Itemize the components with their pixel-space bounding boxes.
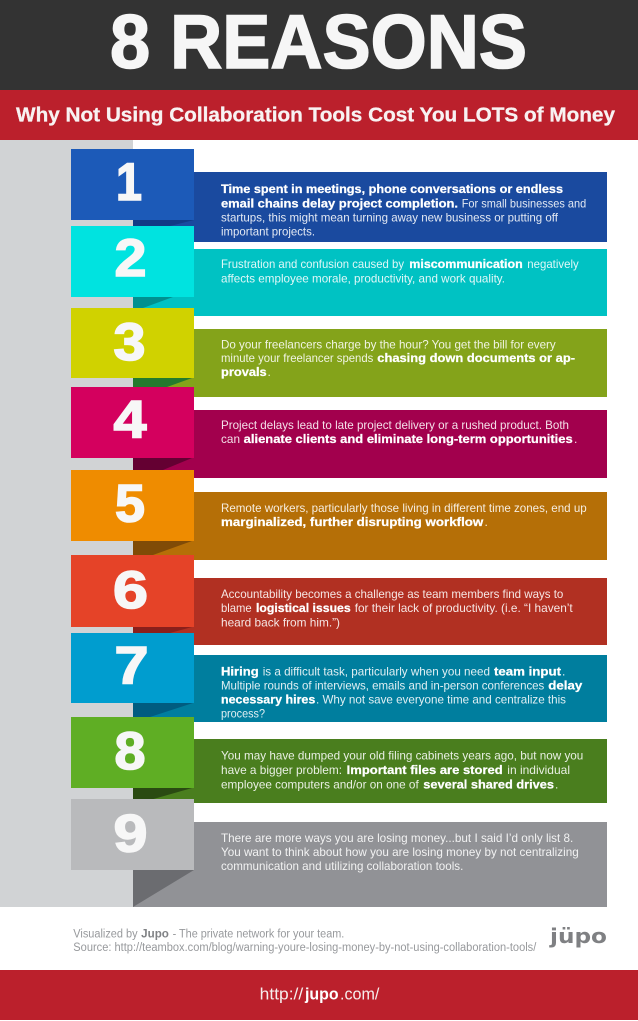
panel 8: important files: several shared drives bbox=[423, 777, 554, 791]
left gray stripe bbox=[0, 140, 133, 907]
panel 6: accountability bbox=[133, 578, 607, 645]
subtitle band bbox=[0, 90, 638, 140]
number tab 1: 1 bbox=[116, 153, 142, 212]
header band bbox=[0, 0, 638, 90]
title: 8 REASONS bbox=[110, 0, 527, 85]
panel 1: project delays: Time spent in meetings, phone conversations or endless bbox=[221, 182, 563, 196]
number tab 8 bbox=[71, 717, 194, 788]
panel 8: important files: employee computers and/or on one of bbox=[221, 777, 419, 791]
panel 2: miscommunication bbox=[133, 249, 607, 316]
panel 8: important files: have a bigger problem: bbox=[221, 763, 342, 777]
panel 2: miscommunication: affects employee morale, productivity, and work quality. bbox=[221, 271, 505, 285]
panel 4: alienate clients bbox=[133, 410, 607, 478]
panel 5: marginalized remote workers: Remote workers, particularly those living in different time zones, end up bbox=[221, 501, 587, 515]
panel 6: accountability: Accountability becomes a challenge as team members find ways to bbox=[221, 587, 564, 601]
footer url: .com/ bbox=[340, 984, 380, 1003]
credits text: Jupo bbox=[141, 928, 169, 940]
panel 6: accountability: for their lack of productivity. (i.e. “I haven’t bbox=[355, 601, 573, 615]
number tab 3 bbox=[71, 308, 194, 378]
panel 1: project delays: startups, this might mean turning away new business or putting off bbox=[221, 210, 559, 224]
logo: jupo: jüpo bbox=[549, 924, 607, 948]
panel 7: hiring bbox=[133, 655, 607, 722]
number tab 7: 7 bbox=[114, 636, 148, 695]
number tab 4: 4 bbox=[114, 390, 147, 449]
footer url bbox=[260, 984, 380, 1003]
panel 5: marginalized remote workers bbox=[133, 492, 607, 560]
panel 3: freelancer cost bbox=[133, 329, 607, 397]
panel 8: important files: . bbox=[555, 777, 558, 791]
number tab 6: 6 bbox=[113, 561, 148, 620]
number tab 4 bbox=[71, 387, 194, 458]
panel 5: marginalized remote workers: . bbox=[484, 515, 488, 529]
panel 2: miscommunication: miscommunication bbox=[409, 257, 523, 271]
panel 7: hiring: . bbox=[562, 664, 565, 678]
credits text: - The private network for your team. bbox=[173, 928, 344, 940]
number tab 9 bbox=[71, 799, 194, 870]
panel 3: freelancer cost: Do your freelancers charge by the hour? You get the bill for every bbox=[221, 337, 556, 351]
number tab 8: 8 bbox=[114, 722, 146, 781]
panel 4: alienate clients: alienate clients and eliminate long-term opportunities bbox=[244, 432, 573, 446]
panel 8: important files: You may have dumped your old filing cabinets years ago, but now you bbox=[221, 748, 583, 762]
footer url: http:// bbox=[260, 984, 303, 1003]
footer band bbox=[0, 970, 638, 1020]
panel 4: alienate clients: Project delays lead to late project delivery or a rushed product. Both bbox=[221, 418, 569, 432]
panel 3: freelancer cost: provals bbox=[221, 365, 267, 379]
panel 1: project delays: important projects. bbox=[221, 224, 315, 238]
footer url: jupo bbox=[304, 984, 339, 1003]
panel 1: project delays: For small businesses and bbox=[462, 196, 586, 210]
number tab 5 bbox=[71, 470, 194, 541]
panel 7: hiring: . Why not save everyone time and centralize this bbox=[316, 692, 566, 706]
subtitle: Why Not Using Collaboration Tools Cost You LOTS of Money bbox=[16, 105, 616, 127]
panel 7: hiring: team input bbox=[494, 664, 561, 678]
panel 3: freelancer cost: chasing down documents or ap- bbox=[377, 351, 575, 365]
panel 6: accountability: logistical issues bbox=[256, 601, 351, 615]
panel 5: marginalized remote workers: marginalized, further disrupting workflow bbox=[221, 515, 484, 529]
panel 7: hiring: delay bbox=[548, 678, 583, 692]
panel 6: accountability: blame bbox=[221, 601, 252, 615]
number tab 1 bbox=[71, 149, 194, 220]
panel 9: more ways: You want to think about how you are losing money by not centralizing bbox=[221, 845, 579, 859]
panel 1: project delays bbox=[133, 172, 607, 242]
panel 2: miscommunication: Frustration and confusion caused by bbox=[221, 257, 404, 271]
number tab 2: 2 bbox=[114, 229, 146, 288]
panel 7: hiring: necessary hires bbox=[221, 692, 316, 706]
panel 7: hiring: is a difficult task, particularly when you need bbox=[263, 664, 490, 678]
number tab 9: 9 bbox=[114, 804, 148, 864]
panel 7: hiring: Multiple rounds of interviews, emails and in-person conferences bbox=[221, 678, 544, 692]
number tab 3: 3 bbox=[114, 313, 146, 372]
credits text: Visualized by bbox=[73, 928, 138, 940]
number tab 6 bbox=[71, 555, 194, 627]
number tab 5: 5 bbox=[115, 475, 145, 534]
panel 1: project delays: email chains delay project completion. bbox=[221, 196, 458, 210]
panel 8: important files: Important files are stored bbox=[347, 763, 503, 777]
panel 9: more ways: communication and utilizing collaboration tools. bbox=[221, 859, 463, 873]
panel 9: more ways bbox=[133, 822, 607, 907]
credits text bbox=[73, 928, 537, 954]
panel 2: miscommunication: negatively bbox=[527, 257, 579, 271]
panel 3: freelancer cost: . bbox=[268, 365, 271, 379]
number tab 2 bbox=[71, 226, 194, 297]
number tab 7 bbox=[71, 633, 194, 703]
panel 8: important files: in individual bbox=[507, 763, 570, 777]
panel 3: freelancer cost: minute your freelancer spends bbox=[221, 351, 373, 365]
panel 7: hiring: Hiring bbox=[221, 664, 259, 678]
panel 4: alienate clients: . bbox=[574, 432, 577, 446]
panel 7: hiring: process? bbox=[221, 706, 265, 720]
panel 9: more ways: There are more ways you are losing money...but I said I’d only list 8. bbox=[221, 831, 573, 845]
panel 8: important files bbox=[133, 739, 607, 803]
panel 6: accountability: heard back from him.”) bbox=[221, 616, 340, 630]
panel 4: alienate clients: can bbox=[221, 432, 240, 446]
credits text: Source: http://teambox.com/blog/warning-youre-losing-money-by-not-using-collaboration-tools/ bbox=[73, 942, 537, 954]
